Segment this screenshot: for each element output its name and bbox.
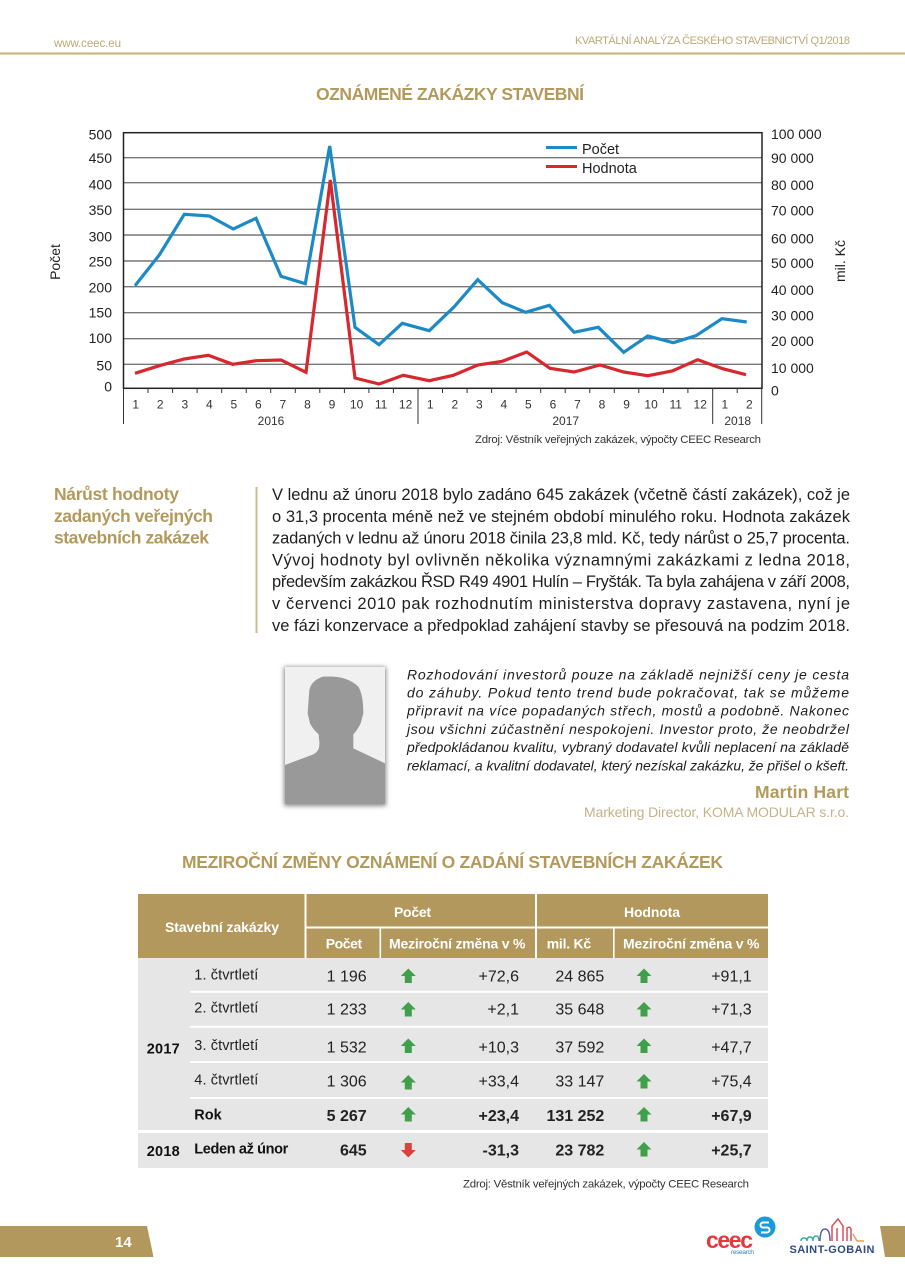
- side heading: zadaných veřejných: [54, 506, 213, 526]
- right axis labels: 0: [771, 382, 779, 398]
- logo: ceec research: [706, 1216, 776, 1256]
- right axis labels: 90 000: [771, 150, 814, 166]
- row: 2. čtvrtletí: [194, 1001, 752, 1018]
- month labels: 2: [157, 398, 164, 412]
- month labels: 8: [599, 398, 606, 412]
- row: 3. čtvrtletí: 3. čtvrtletí: [194, 1038, 258, 1054]
- month labels: 7: [574, 398, 581, 412]
- left axis labels: 300: [89, 228, 112, 244]
- row: 2018 Leden až únor: 645: [340, 1143, 367, 1160]
- month labels: 4: [501, 398, 508, 412]
- body paragraph: [272, 486, 851, 635]
- title: table heading: MEZIROČNÍ ZMĚNY OZNÁMENÍ O ZADÁNÍ STAVEBNÍCH ZAKÁZEK: [182, 851, 723, 872]
- quote: reklamací, a kvalitní dodavatel, který nezískal zakázku, že přišel o kšeft.: [407, 757, 849, 773]
- logo: Saint-Gobain: [790, 1219, 875, 1256]
- month labels: 3: [476, 398, 483, 412]
- body paragraph: zadaných v lednu až únoru 2018 činila 23,8 mld. Kč, tedy nárůst o 25,7 procenta.: [272, 530, 850, 548]
- row: Rok: [194, 1107, 752, 1125]
- footer band with page number: 14: [115, 1234, 132, 1251]
- body paragraph: v červenci 2010 pak rozhodnutím ministerstva dopravy zastavena, nyní je: [272, 595, 850, 613]
- quote: [405, 666, 850, 773]
- left axis labels: 50: [96, 358, 112, 374]
- row: 2018 Leden až únor: [147, 1141, 752, 1160]
- row: 1. čtvrtletí: +72,6: [479, 969, 519, 986]
- line chart: announced contracts: [47, 126, 848, 428]
- right axis labels: 100 000: [771, 126, 822, 142]
- quote author: Martin Hart: [755, 782, 849, 802]
- left axis labels: 150: [89, 304, 112, 320]
- month labels: 1: [132, 398, 139, 412]
- row: 2. čtvrtletí: +71,3: [711, 1001, 752, 1018]
- row: Rok: +23,4: [479, 1108, 519, 1125]
- right axis labels: 40 000: [771, 282, 814, 298]
- table header: Hodnota: [624, 904, 680, 920]
- year labels: 2016: [258, 414, 285, 428]
- year label 2017: 2017: [147, 1042, 180, 1058]
- month labels: 1: [721, 398, 728, 412]
- legend: [546, 142, 638, 177]
- month labels: 3: [181, 398, 188, 412]
- row: 1. čtvrtletí: +91,1: [711, 969, 752, 986]
- row: 3. čtvrtletí: 37 592: [555, 1039, 604, 1056]
- left axis labels: 350: [89, 202, 112, 218]
- row: 2. čtvrtletí: +2,1: [487, 1001, 519, 1018]
- year labels: [258, 414, 751, 428]
- row: 3. čtvrtletí: +47,7: [711, 1039, 752, 1056]
- vertical divider: [256, 487, 258, 633]
- month labels: [132, 398, 753, 412]
- right axis labels: 10 000: [771, 360, 814, 376]
- year labels: 2017: [552, 414, 579, 428]
- right axis labels: [771, 126, 822, 398]
- table header: Meziroční změna v %: [389, 936, 526, 952]
- row: 3. čtvrtletí: 1 532: [327, 1039, 367, 1056]
- month labels: 4: [206, 398, 213, 412]
- quote: jsou všichni zúčastnění nespokojeni. Investor proto, že neobdržel: [405, 721, 850, 737]
- month labels: 5: [231, 398, 238, 412]
- row: 3. čtvrtletí: [194, 1038, 752, 1056]
- month labels: 11: [375, 398, 388, 412]
- body paragraph: o 31,3 procenta méně než ve stejném období minulého roku. Hodnota zakázek: [272, 508, 851, 526]
- month labels: 11: [669, 398, 682, 412]
- footer band right: [880, 1226, 905, 1257]
- month labels: 2: [451, 398, 458, 412]
- body paragraph: Vývoj hodnoty byl ovlivněn několika významnými zakázkami z ledna 2018,: [272, 551, 850, 569]
- row: 2018 Leden až únor: 2018: [147, 1144, 180, 1160]
- month labels: 10: [644, 398, 658, 412]
- row: 4. čtvrtletí: 4. čtvrtletí: [194, 1072, 258, 1088]
- month labels: 2: [746, 398, 753, 412]
- row: Rok: +67,9: [711, 1108, 752, 1125]
- page header: www.ceec.eu: [53, 38, 121, 50]
- line: Počet: [135, 146, 747, 352]
- row: Rok: 131 252: [546, 1108, 604, 1125]
- body paragraph: ve fázi konzervace a předpoklad zahájení stavby se přesouvá na podzim 2018.: [272, 617, 850, 635]
- chart source note: Zdroj: Věstník veřejných zakázek, výpočty CEEC Research: [475, 434, 761, 446]
- row: 2018 Leden až únor: Leden až únor: [194, 1141, 289, 1157]
- quote: Rozhodování investorů pouze na základě nejnižší ceny je cesta: [407, 666, 849, 682]
- month labels: 5: [525, 398, 532, 412]
- row: 2018 Leden až únor: +25,7: [711, 1143, 752, 1160]
- side heading: [54, 484, 213, 548]
- table header: Počet: [326, 936, 363, 952]
- portrait placeholder: [284, 667, 386, 806]
- legend: Počet: [582, 142, 619, 158]
- axis title: mil. Kč: mil. Kč: [832, 240, 848, 282]
- table header: Počet: [394, 904, 431, 920]
- right axis labels: 50 000: [771, 255, 814, 271]
- left axis labels: 400: [89, 176, 112, 192]
- month labels: 9: [623, 398, 630, 412]
- axis title: Počet: Počet: [47, 244, 63, 280]
- row: Rok: 5 267: [327, 1108, 367, 1125]
- row: 4. čtvrtletí: [194, 1072, 752, 1091]
- row: Rok: Rok: [194, 1107, 223, 1123]
- row: 2. čtvrtletí: 35 648: [555, 1001, 604, 1018]
- page header: [0, 34, 905, 54]
- row: 4. čtvrtletí: 33 147: [555, 1074, 604, 1091]
- month labels: 12: [694, 398, 707, 412]
- month labels: 6: [255, 398, 262, 412]
- line: Hodnota: [135, 180, 746, 384]
- left axis labels: 250: [89, 254, 112, 270]
- table header: Meziroční změna v %: [623, 936, 760, 952]
- right axis labels: 30 000: [771, 308, 814, 324]
- year labels: 2018: [724, 414, 751, 428]
- logo: ceec research: ceec: [706, 1227, 753, 1253]
- table: [138, 894, 768, 1168]
- row: 3. čtvrtletí: +10,3: [479, 1039, 519, 1056]
- row: 2. čtvrtletí: 2. čtvrtletí: [194, 1001, 258, 1017]
- body paragraph: především zakázkou ŘSD R49 4901 Hulín – Fryšták. Ta byla zahájena v září 2008,: [272, 572, 850, 591]
- month labels: 1: [427, 398, 434, 412]
- row: 1. čtvrtletí: 1 196: [327, 969, 367, 986]
- table source note: Zdroj: Věstník veřejných zakázek, výpočty CEEC Research: [463, 1178, 749, 1190]
- side heading: stavebních zakázek: [54, 528, 209, 548]
- left axis labels: 100: [89, 330, 112, 346]
- month labels: 9: [329, 398, 336, 412]
- row: 2018 Leden až únor: 23 782: [555, 1143, 604, 1160]
- row: 1. čtvrtletí: 1. čtvrtletí: [194, 967, 258, 983]
- month labels: 6: [550, 398, 557, 412]
- quote: připravit na více popadaných střech, mostů a podobně. Nakonec: [406, 703, 849, 719]
- row: 1. čtvrtletí: 24 865: [555, 969, 604, 986]
- table header: Stavební zakázky: [165, 919, 279, 935]
- quote author: [584, 782, 849, 820]
- row: 4. čtvrtletí: +75,4: [711, 1074, 752, 1091]
- table header: [165, 904, 760, 952]
- month labels: 7: [280, 398, 287, 412]
- logo: ceec research: research: [731, 1249, 754, 1256]
- row: 1. čtvrtletí: [194, 967, 752, 986]
- left axis labels: 200: [89, 280, 112, 296]
- title: chart heading: OZNÁMENÉ ZAKÁZKY STAVEBNÍ: [316, 83, 585, 104]
- month labels: 10: [350, 398, 364, 412]
- right axis labels: 80 000: [771, 177, 814, 193]
- left axis labels: 450: [89, 150, 112, 166]
- row: 2018 Leden až únor: -31,3: [483, 1143, 519, 1160]
- left axis labels: 500: [89, 126, 112, 142]
- row: 4. čtvrtletí: 1 306: [327, 1074, 367, 1091]
- right axis labels: 20 000: [771, 333, 814, 349]
- legend: Hodnota: [582, 161, 638, 177]
- left axis labels: [89, 126, 112, 394]
- quote author: Marketing Director, KOMA MODULAR s.r.o.: [584, 804, 849, 820]
- footer band with page number: [0, 1226, 154, 1257]
- right axis labels: 60 000: [771, 230, 814, 246]
- table header: mil. Kč: [547, 936, 591, 952]
- quote: do záhuby. Pokud tento trend bude pokračovat, tak se můžeme: [407, 684, 849, 700]
- side heading: Nárůst hodnoty: [54, 484, 179, 504]
- logo: Saint-Gobain: SAINT-GOBAIN: [790, 1244, 875, 1256]
- icon: person silhouette: [285, 676, 385, 804]
- page header: KVARTÁLNÍ ANALÝZA ČESKÉHO STAVEBNICTVÍ Q1/2018: [575, 34, 850, 47]
- month labels: 12: [399, 398, 413, 412]
- quote: předpokládanou kvalitu, vybraný dodavatel kvůli neplacení na základě: [406, 739, 849, 755]
- body paragraph: V lednu až únoru 2018 bylo zadáno 645 zakázek (včetně částí zakázek), což je: [272, 486, 850, 504]
- row: 2. čtvrtletí: 1 233: [327, 1001, 367, 1018]
- right axis labels: 70 000: [771, 202, 814, 218]
- row: 4. čtvrtletí: +33,4: [479, 1074, 519, 1091]
- left axis labels: 0: [104, 378, 112, 394]
- month labels: 8: [304, 398, 311, 412]
